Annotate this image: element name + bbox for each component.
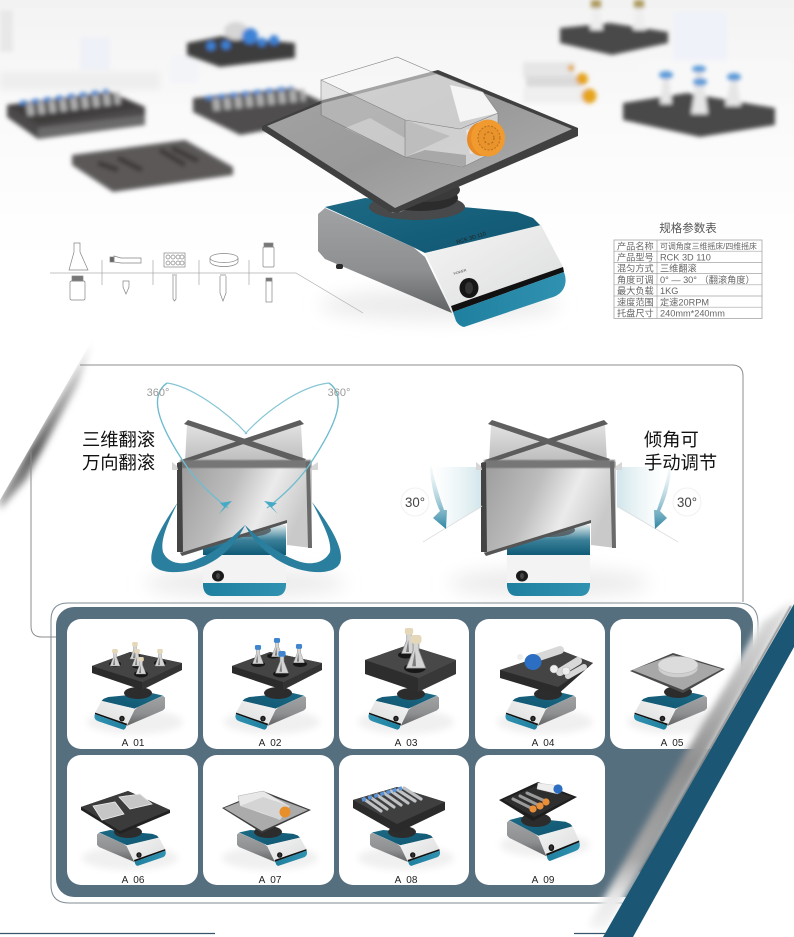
icon: conical tube <box>220 275 226 301</box>
spec rows: 产品型号 <box>617 252 654 262</box>
left page fold <box>0 325 95 510</box>
spec rows: 产品名称 <box>617 240 654 251</box>
orbit swoosh left <box>151 502 245 572</box>
background: blurred laboratory scene <box>0 0 794 260</box>
spec rows: RCK 3D 110 <box>660 252 711 262</box>
orbit line with arrow, left to centre <box>157 383 232 514</box>
heading: manual adjust: 手动调节 <box>644 452 717 473</box>
icon: vial <box>266 278 272 302</box>
spec rows: 1KG <box>660 286 678 296</box>
label A06: A 06 <box>122 875 145 886</box>
orbit line with arrow, right to centre <box>264 383 338 514</box>
card A04 <box>475 619 605 749</box>
angle badge right <box>673 488 701 516</box>
icon: small centrifuge tube <box>123 281 129 294</box>
spec rows: 最大负载 <box>617 285 654 296</box>
spec rows: 三维翻滚 <box>660 263 697 274</box>
base feet <box>336 264 343 269</box>
accessories outer frame <box>51 603 758 903</box>
machine base <box>318 198 566 327</box>
card A03 <box>339 619 469 749</box>
card A06 <box>67 755 198 886</box>
blue cap <box>553 784 563 794</box>
orange cap <box>467 120 505 156</box>
table title: 规格参数表 <box>659 221 717 235</box>
orbit arcs behind trays <box>167 383 329 434</box>
card A09 <box>475 755 605 886</box>
label A01: A 01 <box>122 738 145 749</box>
tilt fan right <box>617 467 665 529</box>
background: stacked flasks with orange caps <box>523 62 596 104</box>
reference line right <box>617 506 678 542</box>
label: 360 degrees right: 360° <box>328 387 350 399</box>
model text: RCK 3D 110 <box>456 231 487 246</box>
label A05: A 05 <box>661 738 684 749</box>
blue bottle cap <box>524 654 542 670</box>
spec rows: 定速20RPM <box>660 296 709 307</box>
rocker trays and machine <box>449 420 649 598</box>
tray <box>262 70 578 213</box>
tilt arrow right <box>654 467 671 529</box>
well plates <box>93 794 152 820</box>
spec table <box>614 221 762 318</box>
spec rows <box>617 240 757 318</box>
spec rows: 托盘尺寸 <box>617 308 654 318</box>
label: 360 degrees left: 360° <box>147 387 169 399</box>
background tray: blue bottles <box>187 22 295 67</box>
icon: bottle <box>263 243 274 267</box>
right page fold <box>588 600 794 937</box>
diagram: 3D rolling motion <box>82 383 350 598</box>
line icons: supported vessels <box>50 243 363 313</box>
tilt arrow left <box>430 467 447 529</box>
background tray: tubes centre <box>193 88 325 135</box>
label A04: A 04 <box>532 738 555 749</box>
accessories panel <box>56 607 753 897</box>
icon: petri dish <box>210 254 238 266</box>
heading: 3D rolling: 三维翻滚 <box>82 429 155 450</box>
spec rows: 角度可调 <box>617 274 654 285</box>
reference line left <box>423 506 482 542</box>
power label: POWER <box>453 268 467 276</box>
background tray: tubes left <box>7 91 145 139</box>
culture flask <box>321 57 505 167</box>
angle badge left: 30° <box>405 495 425 510</box>
bottom rule <box>0 932 606 934</box>
background tray: empty foam <box>72 140 233 192</box>
tubes with orange caps <box>513 793 550 813</box>
tubes <box>364 788 421 811</box>
card A08 <box>339 755 469 886</box>
spec rows: 0° — 30° （翻滚角度） <box>660 274 755 285</box>
icon: erlenmeyer flask <box>69 243 88 270</box>
angle badge left <box>401 488 429 516</box>
card A07 <box>203 755 334 886</box>
orange cap <box>280 806 290 818</box>
spec rows: 可调角度三维摇床/四维摇床 <box>660 241 757 251</box>
tilt fan left <box>432 467 482 529</box>
icon: T-flask <box>110 256 141 263</box>
hero product: rocker with tray and culture flask <box>262 57 578 327</box>
rotating neck <box>369 172 465 220</box>
icon: long tube <box>172 275 177 301</box>
angle badge right: 30° <box>677 495 697 510</box>
icon: well plate <box>164 253 185 267</box>
label A07: A 07 <box>259 875 282 886</box>
card A01 <box>67 619 198 749</box>
rocker trays and machine <box>145 420 345 598</box>
label A08: A 08 <box>395 875 418 886</box>
background tray: flasks olive caps <box>560 0 668 55</box>
background tray: blue-capped flasks <box>623 66 775 137</box>
card A02 <box>203 619 334 749</box>
diagram: adjustable tilt <box>401 420 717 598</box>
orbit swoosh right <box>245 502 341 572</box>
feature frame line <box>31 365 743 637</box>
dark blue diagonal band <box>603 604 794 937</box>
card A05 <box>610 619 741 749</box>
label A03: A 03 <box>395 738 418 749</box>
icon: reagent bottle <box>70 276 85 300</box>
label A02: A 02 <box>259 738 282 749</box>
spec rows: 混匀方式 <box>617 263 654 274</box>
heading: universal rolling: 万向翻滚 <box>82 452 155 473</box>
heading: tilt: 倾角可 <box>644 429 699 450</box>
spec rows: 240mm*240mm <box>660 308 725 318</box>
label A09: A 09 <box>532 875 555 886</box>
spec rows: 速度范围 <box>617 296 654 307</box>
